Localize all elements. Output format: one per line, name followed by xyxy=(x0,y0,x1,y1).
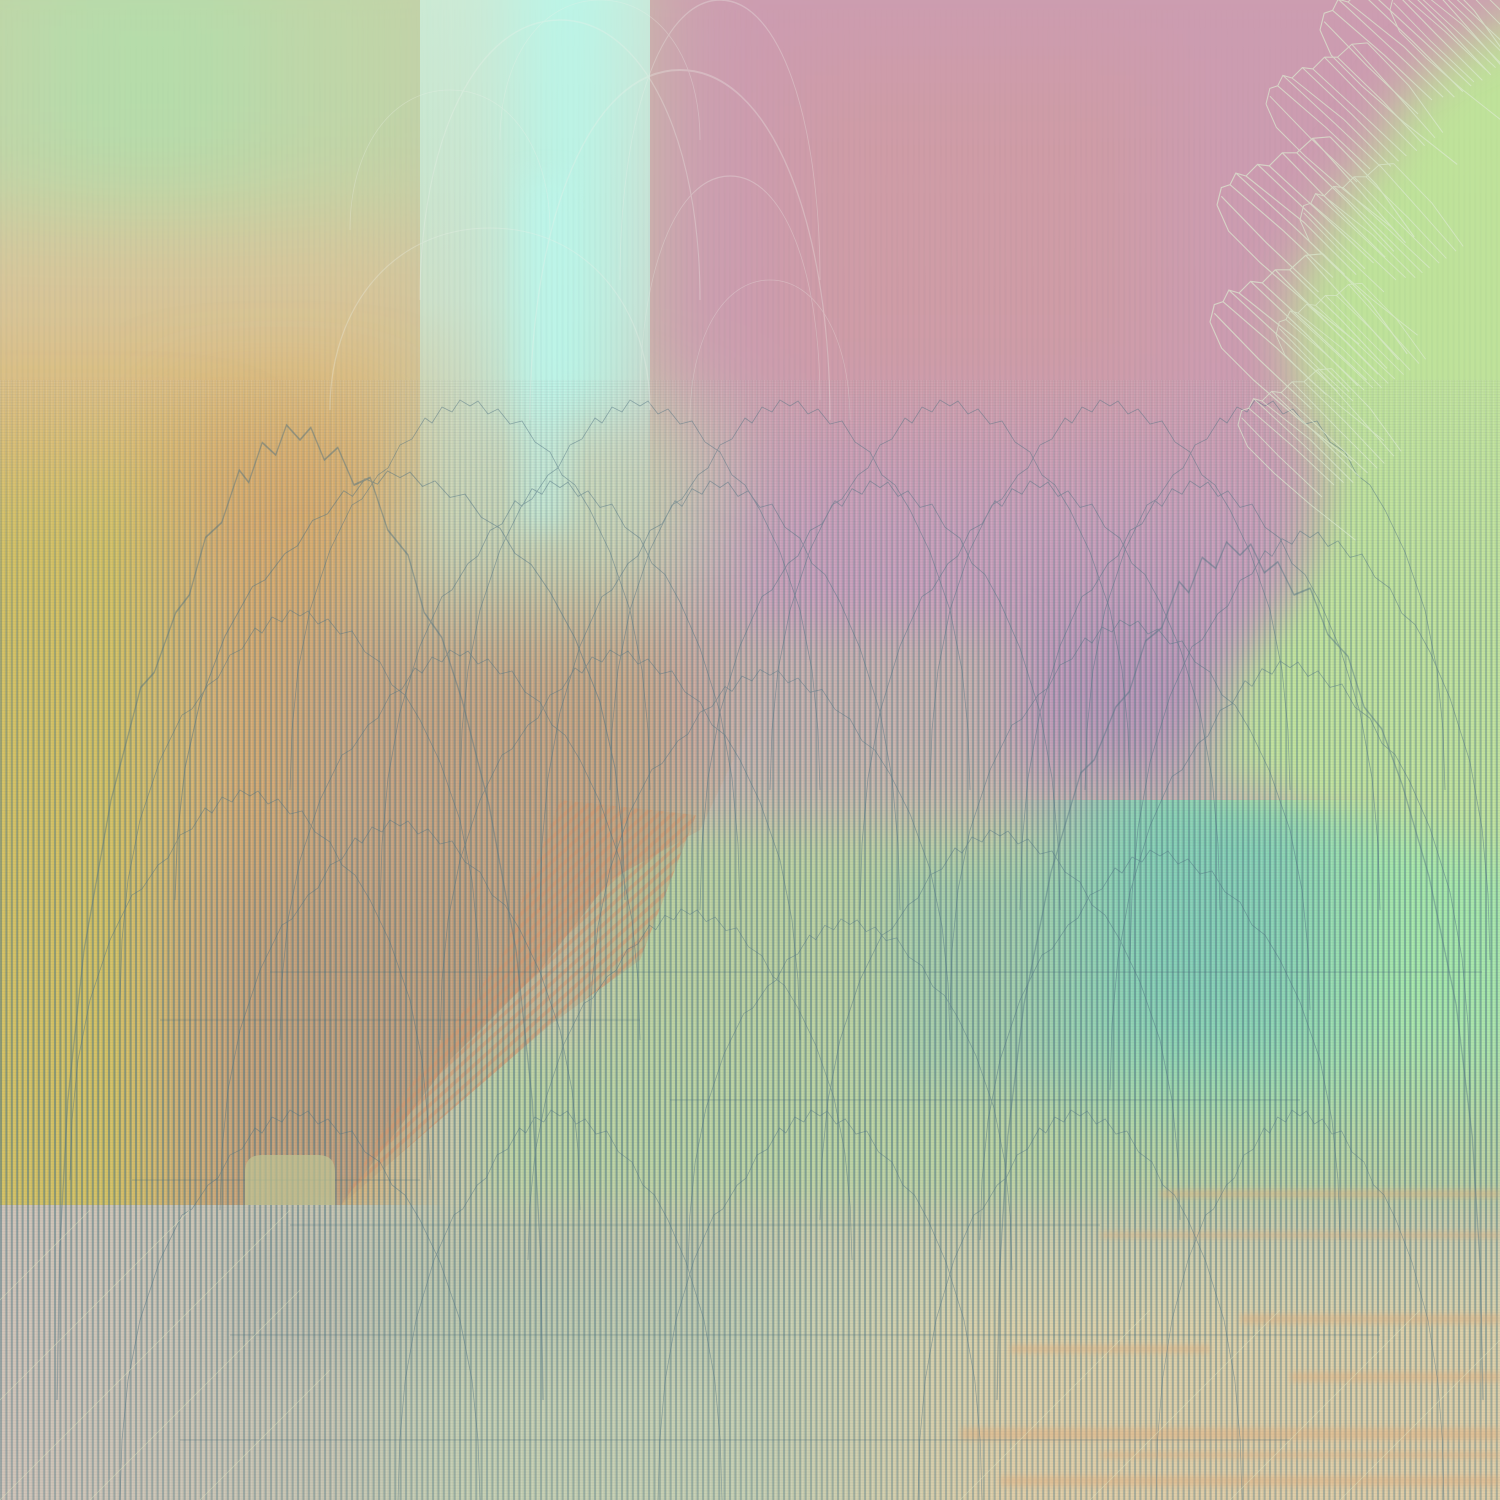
stripes: fine crosshatch xyxy=(0,380,1500,1500)
soft colour washes xyxy=(0,0,1500,800)
panel: muted bottom band xyxy=(0,1190,1500,1500)
panel: muted centre patch xyxy=(700,630,1010,830)
panel: right green scalloped mass xyxy=(1205,0,1500,900)
panel: pale green lower-centre field xyxy=(480,830,1500,1210)
arches: pale smooth arches around light column xyxy=(330,0,850,420)
panel: tan hatched diagonal mass xyxy=(210,620,690,1320)
panel: teal band with hard top edge xyxy=(1070,760,1500,1090)
panel: white-cyan vertical light column xyxy=(420,0,650,548)
bands: orange horizontal streaks lower right xyxy=(960,1190,1500,1486)
rule lines: horizontal dark hairlines xyxy=(132,972,1482,1440)
shape: rounded tab at base of diagonal mass xyxy=(245,1155,335,1205)
panel: yellow left block xyxy=(0,420,380,1370)
hatch: pale diagonal triangles bottom corners xyxy=(0,1210,1500,1500)
fans: pale hatched scallops top right xyxy=(1210,0,1500,540)
hatch: diagonal orange lines xyxy=(340,800,696,1206)
stripes: vertical line screen xyxy=(0,380,1498,1500)
arches: dark jagged scalloped rows xyxy=(57,400,1490,1500)
